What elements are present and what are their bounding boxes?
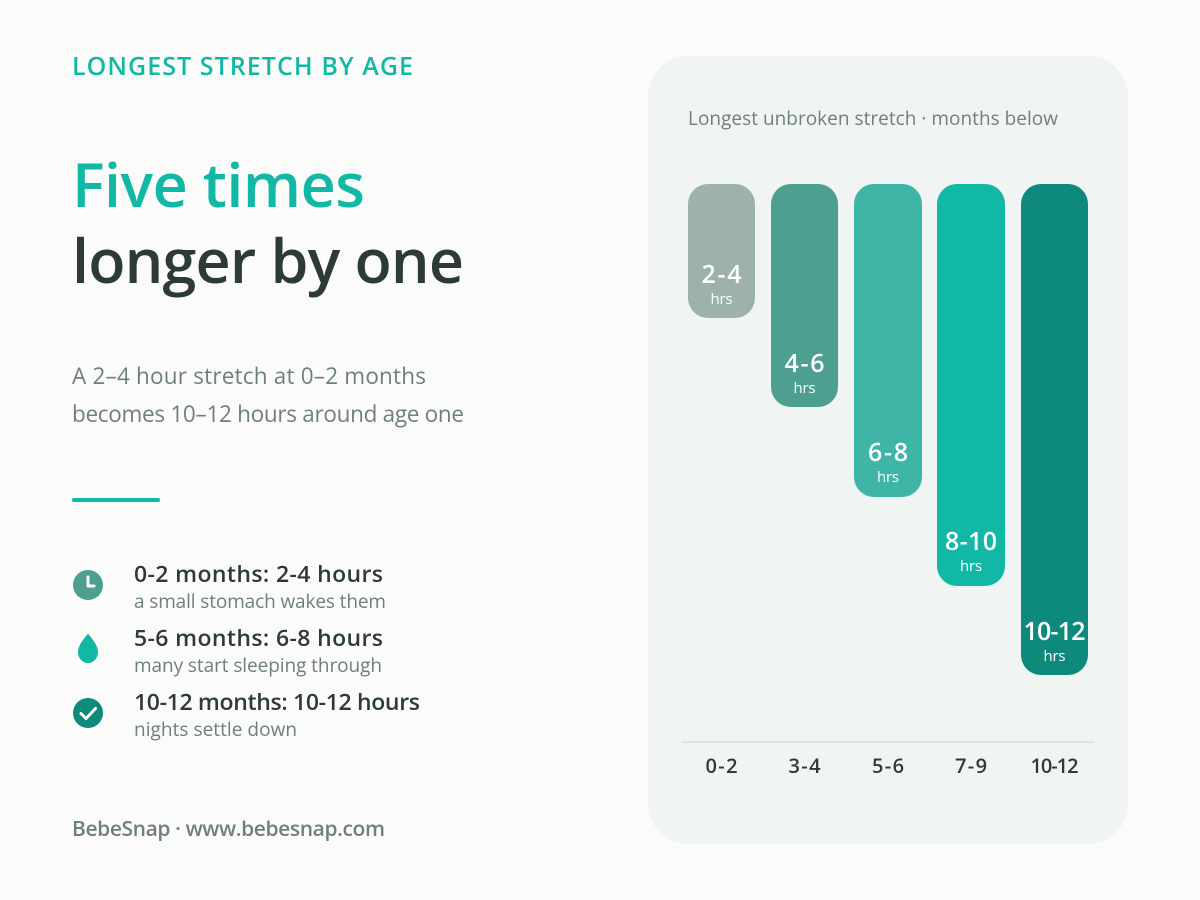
description: becomes 10–12 hours around age one xyxy=(72,398,464,429)
point: 5-6 months: 5-6 months: 6-8 hours xyxy=(134,621,383,653)
bar 10-12: hrs xyxy=(1044,646,1066,666)
title: longer by one xyxy=(72,218,464,301)
point: 5-6 months xyxy=(78,621,383,678)
axis labels: 10-12 xyxy=(1030,752,1078,779)
axis labels: 5-6 xyxy=(872,752,904,779)
eyebrow heading: LONGEST STRETCH BY AGE xyxy=(72,49,413,83)
bar 5-6: 6-8 xyxy=(868,435,908,469)
axis labels: 3-4 xyxy=(788,752,821,779)
bar 10-12 xyxy=(1021,184,1088,675)
axis labels: 7-9 xyxy=(955,752,987,779)
chart caption: Longest unbroken stretch · months below xyxy=(688,105,1058,131)
bar 7-9: hrs xyxy=(960,556,982,576)
title: Five times xyxy=(72,142,365,225)
bar 7-9: 8-10 xyxy=(945,524,997,558)
panel: bar chart xyxy=(648,56,1128,844)
point: 10-12 months: 10-12 months: 10-12 hours xyxy=(134,685,420,717)
bar 0-2: hrs xyxy=(710,289,732,309)
icon: check xyxy=(73,698,103,728)
point: 0-2 months: a small stomach wakes them xyxy=(134,588,386,614)
bar 0-2 xyxy=(688,184,755,318)
bar 0-2: 2-4 xyxy=(702,257,742,291)
description: A 2–4 hour stretch at 0–2 months xyxy=(72,360,426,391)
title xyxy=(72,142,464,301)
bar 3-4: hrs xyxy=(794,378,816,398)
point: 5-6 months: many start sleeping through xyxy=(134,652,382,678)
axis labels xyxy=(706,752,1078,779)
point: 10-12 months xyxy=(73,685,420,742)
bar 3-4: 4-6 xyxy=(784,346,824,380)
icon: clock xyxy=(73,570,103,600)
footer: BebeSnap · www.bebesnap.com xyxy=(72,815,385,843)
bar 5-6 xyxy=(854,184,922,497)
bar 7-9 xyxy=(937,184,1005,586)
axis labels: 0-2 xyxy=(706,752,738,779)
bar 5-6: hrs xyxy=(877,467,899,487)
point: 0-2 months: 0-2 months: 2-4 hours xyxy=(134,557,383,589)
key points list xyxy=(73,557,420,742)
point: 10-12 months: nights settle down xyxy=(134,716,297,742)
description xyxy=(72,360,464,429)
icon: water drop xyxy=(78,634,98,663)
point: 0-2 months xyxy=(73,557,386,614)
bar 10-12: 10-12 xyxy=(1024,614,1086,648)
bar 3-4 xyxy=(771,184,838,407)
